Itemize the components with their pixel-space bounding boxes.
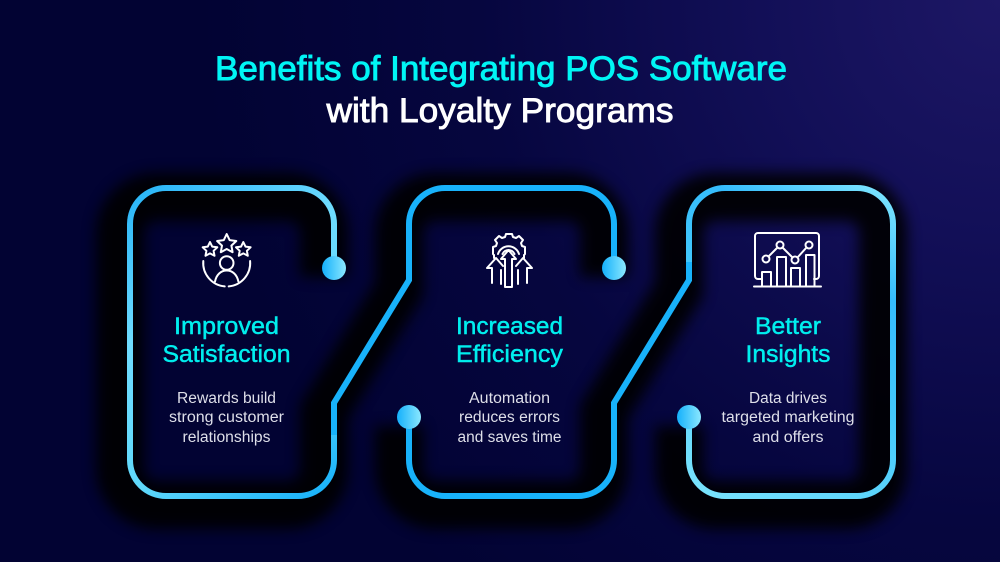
connector outline: efficiency bbox=[409, 188, 614, 496]
heading: Improved bbox=[174, 313, 279, 340]
heading bbox=[456, 313, 563, 368]
heading bbox=[162, 313, 290, 368]
line shadows bbox=[120, 197, 883, 505]
description: and saves time bbox=[458, 429, 562, 446]
description: Rewards build bbox=[177, 390, 276, 407]
heading: Efficiency bbox=[456, 341, 563, 368]
connector dots bbox=[397, 256, 626, 429]
title: with Loyalty Programs bbox=[325, 92, 674, 130]
connector: diagonal one bbox=[334, 250, 409, 435]
description bbox=[169, 390, 284, 446]
connector: diagonal two bbox=[614, 262, 689, 435]
description bbox=[722, 390, 854, 446]
description: strong customer bbox=[169, 409, 284, 426]
description: relationships bbox=[182, 429, 271, 446]
connector dot bbox=[322, 256, 346, 280]
panel: increased efficiency bbox=[397, 188, 626, 496]
description: Automation bbox=[469, 390, 550, 407]
icon: chart on screen bbox=[754, 233, 821, 286]
description bbox=[458, 390, 562, 446]
heading: Increased bbox=[456, 313, 563, 340]
panel: improved satisfaction bbox=[130, 188, 346, 496]
connector dot bbox=[677, 405, 701, 429]
heading: Better bbox=[755, 313, 821, 340]
description: targeted marketing bbox=[722, 409, 854, 426]
connector outline: insights bbox=[689, 188, 893, 496]
panel: better insights bbox=[677, 188, 893, 496]
heading: Satisfaction bbox=[162, 341, 290, 368]
icon: gear and arrows bbox=[487, 234, 532, 287]
icon: stars and person bbox=[203, 234, 251, 286]
description: and offers bbox=[752, 429, 824, 446]
title: Benefits of Integrating POS Software bbox=[215, 50, 787, 88]
title bbox=[215, 50, 787, 130]
heading bbox=[746, 313, 830, 368]
description: reduces errors bbox=[459, 409, 560, 426]
heading: Insights bbox=[746, 341, 830, 368]
description: Data drives bbox=[749, 390, 827, 407]
connector outline: satisfaction bbox=[130, 188, 334, 496]
